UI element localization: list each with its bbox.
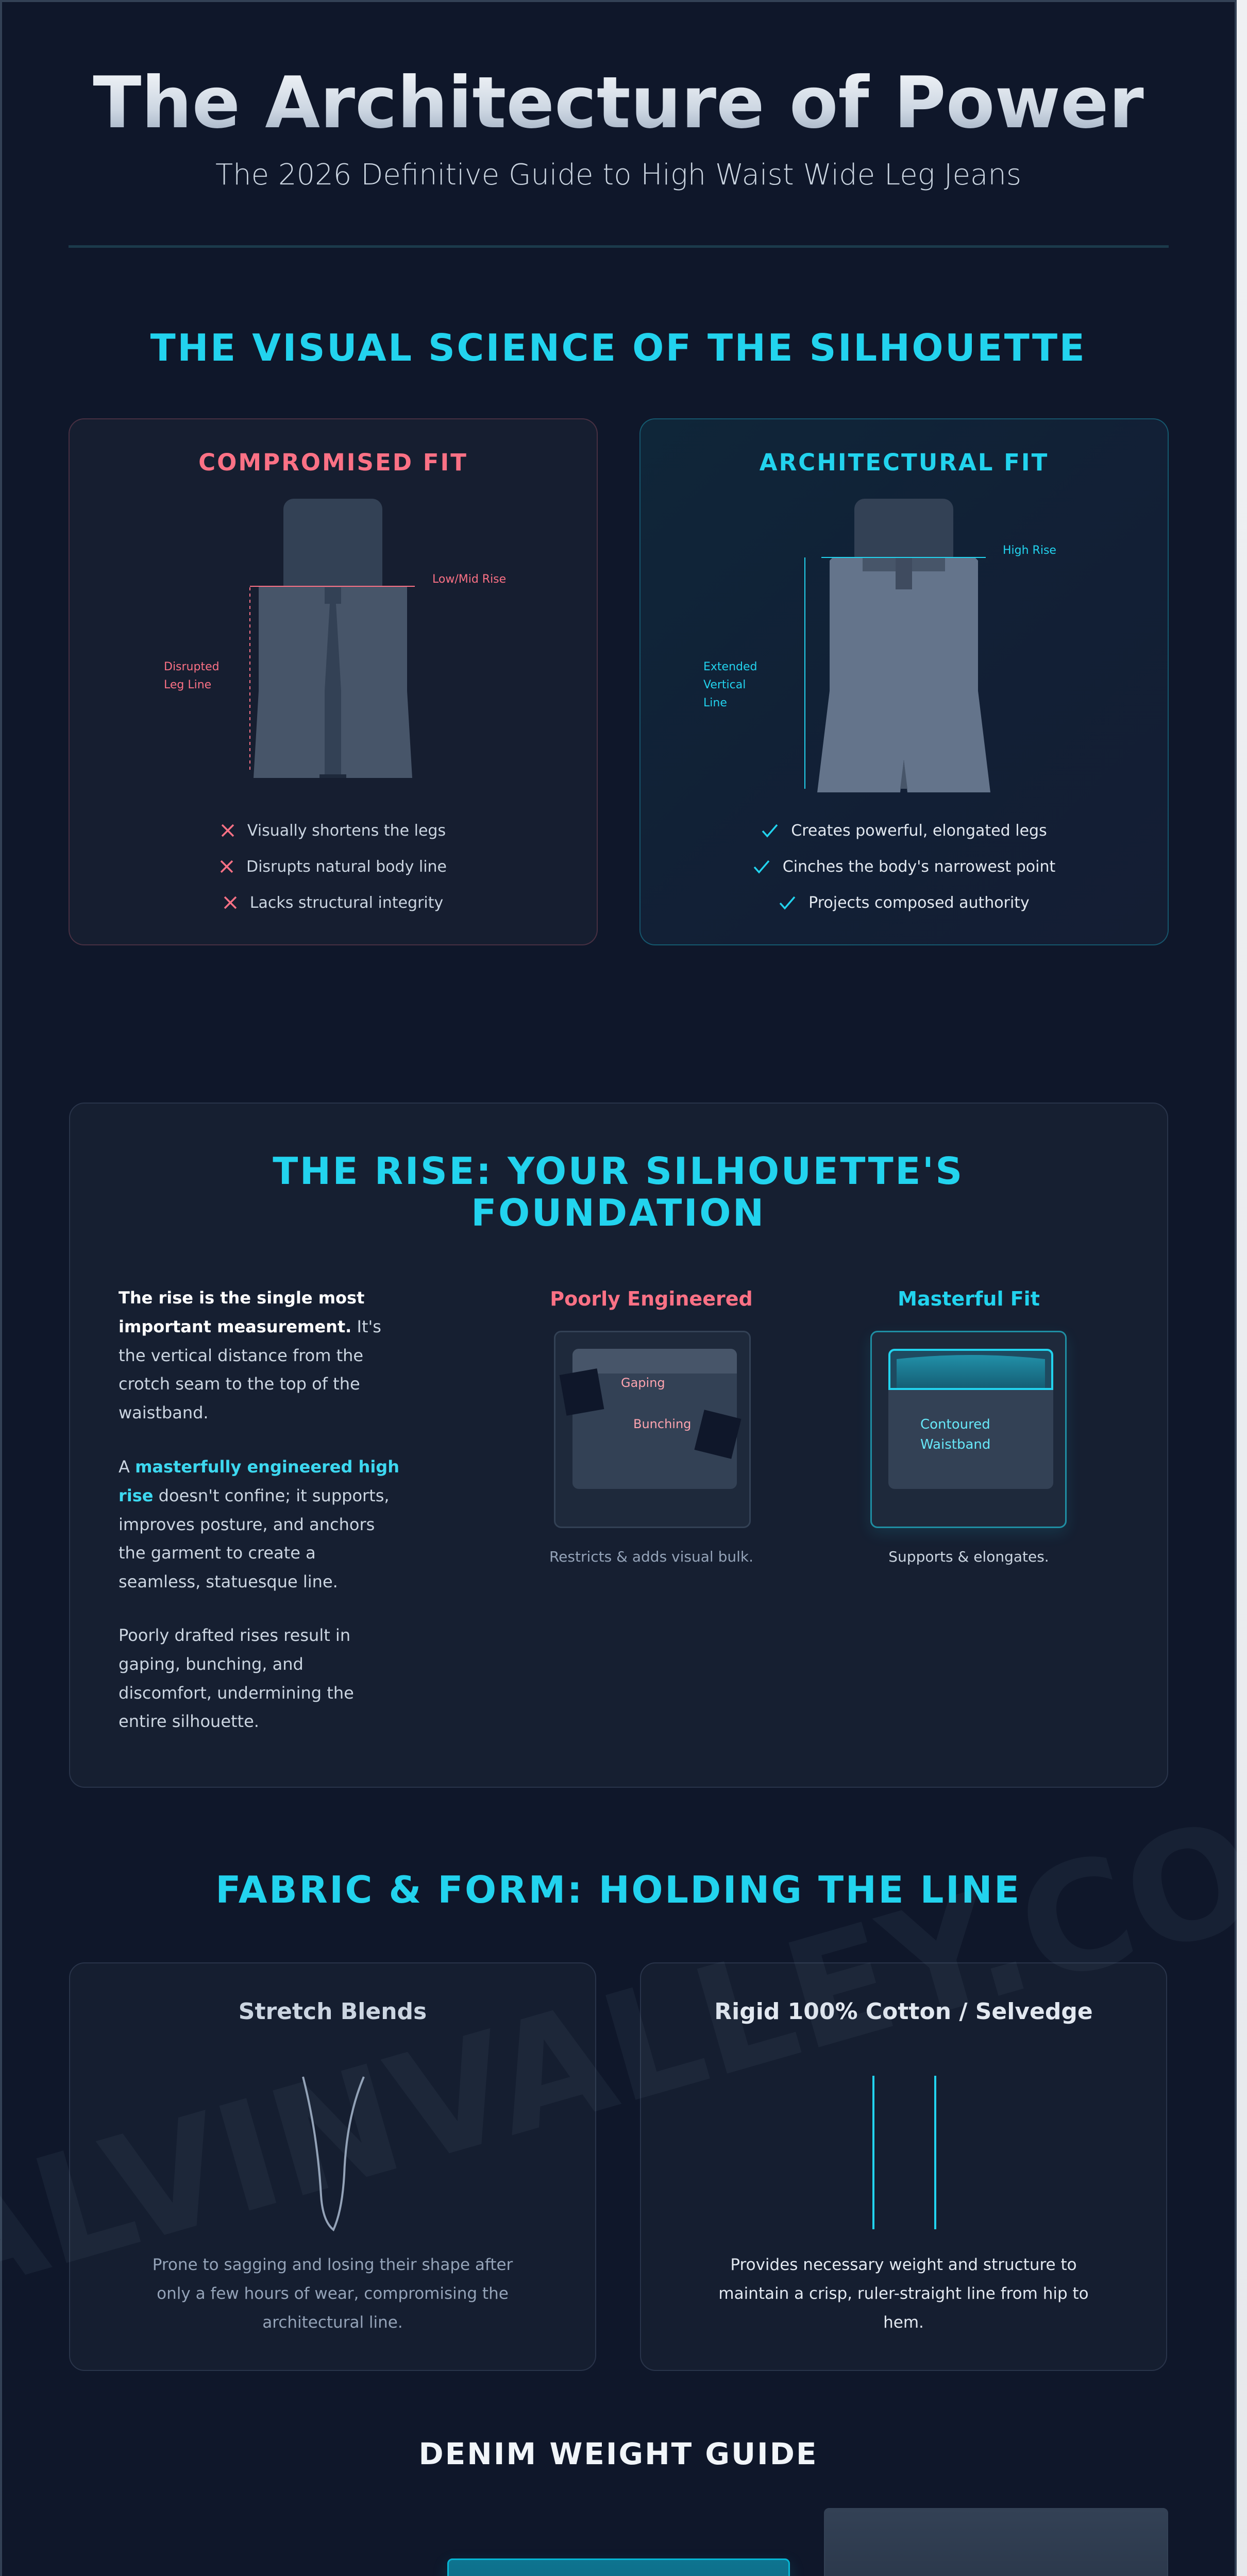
subtitle: The 2026 Definitive Guide to High Waist Wide Leg Jeans [215,158,1021,192]
heading: architectural fit: ARCHITECTURAL FIT [760,449,1049,476]
text: stretch description: Prone to sagging and losing their shape after [153,2256,513,2274]
heading: the rise: FOUNDATION [471,1191,766,1234]
label: extended vertical line [703,660,757,709]
icon: sagging curve [302,2076,365,2231]
text: rigid description: maintain a crisp, ruler-straight line from hip to [718,2284,1089,2303]
list: compromised drawbacks [221,821,447,912]
text block: rise explanation: improves posture, and anchors [119,1515,375,1534]
bar: mid [447,2558,790,2576]
card: stretch blends [69,1962,596,2371]
text block: rise explanation: crotch seam to the top of the [119,1374,360,1394]
label: high rise: High Rise [1003,544,1056,557]
list: architectural benefits [753,821,1055,912]
panel: architectural fit [639,418,1169,945]
text: stretch description [153,2256,513,2332]
heading: fabric & form: FABRIC & FORM: HOLDING THE LINE [215,1868,1021,1911]
diagram: contoured waistband [870,1331,1067,1528]
heading: visual science: THE VISUAL SCIENCE OF THE SILHOUETTE [150,326,1086,369]
text block: rise explanation: the vertical distance from the [119,1346,363,1365]
text: rigid description: hem. [883,2313,924,2332]
label: contoured waistband: Contoured [920,1417,990,1432]
chart: denim weight bars [444,2508,1168,2576]
text block: rise explanation: entire silhouette. [119,1711,259,1731]
card: rigid cotton [640,1962,1167,2371]
label: disrupted leg line: Leg Line [164,679,211,691]
icon: straight lines [872,2076,936,2229]
text: rigid description: Provides necessary weight and structure to [730,2256,1077,2274]
text block: rise explanation: The rise is the single most [119,1288,364,1308]
heading: the rise [273,1149,964,1234]
label: extended vertical line: Extended [703,660,757,673]
label: disrupted leg line [164,660,220,691]
item: cinches: Cinches the body's narrowest point [783,857,1055,876]
label: bunching: Bunching [633,1417,691,1431]
title: The Architecture of Power [93,61,1144,144]
diagram: poorly engineered waistband [554,1331,751,1528]
label: gaping: Gaping [621,1376,665,1390]
text block: rise explanation: important measurement. It's [119,1317,381,1336]
label: extended vertical line: Vertical [703,679,746,691]
text block: rise explanation: rise doesn't confine; it supports, [119,1486,390,1505]
title: rigid cotton: Rigid 100% Cotton / Selvedge [714,1998,1093,2025]
heading: compromised fit: COMPROMISED FIT [198,449,468,476]
text: stretch description: architectural line. [262,2313,403,2332]
label: extended vertical line: Line [703,697,727,709]
figure: architectural silhouette [804,499,990,792]
panel: the rise [69,1103,1168,1788]
item: shortens legs: Visually shortens the legs [247,821,446,840]
label: contoured waistband [920,1417,990,1452]
title: stretch blends: Stretch Blends [239,1998,427,2025]
text: stretch description: only a few hours of wear, compromising the [157,2284,509,2303]
text block: rise explanation: discomfort, undermining the [119,1683,354,1703]
figure: compromised silhouette [249,499,415,778]
heading: masterful fit: Masterful Fit [898,1287,1040,1310]
text block: rise explanation: Poorly drafted rises result in [119,1625,350,1645]
label: contoured waistband: Waistband [920,1437,990,1452]
heading: the rise: THE RISE: YOUR SILHOUETTE'S [273,1149,964,1193]
label: disrupted leg line: Disrupted [164,660,220,673]
item: disrupts line: Disrupts natural body line [246,857,447,876]
item: lacks integrity: Lacks structural integrity [250,893,443,912]
text block: rise explanation [119,1288,399,1731]
text: rigid description [718,2256,1089,2332]
text block: rise explanation: the garment to create a [119,1543,316,1563]
caption: supports: Supports & elongates. [888,1548,1049,1565]
text block: rise explanation: gaping, bunching, and [119,1654,304,1674]
panel: compromised fit [69,418,598,945]
caption: restricts: Restricts & adds visual bulk. [549,1548,753,1565]
heading: poorly engineered: Poorly Engineered [550,1287,753,1310]
text block: rise explanation: A masterfully engineered high [119,1457,399,1477]
item: authority: Projects composed authority [808,893,1030,912]
heading: denim weight guide: DENIM WEIGHT GUIDE [419,2436,818,2471]
text block: rise explanation: waistband. [119,1403,209,1422]
label: low/mid rise: Low/Mid Rise [432,573,506,586]
text block: rise explanation: seamless, statuesque line. [119,1572,338,1591]
bar: heavy [824,2508,1168,2576]
item: elongated legs: Creates powerful, elongated legs [791,821,1047,840]
